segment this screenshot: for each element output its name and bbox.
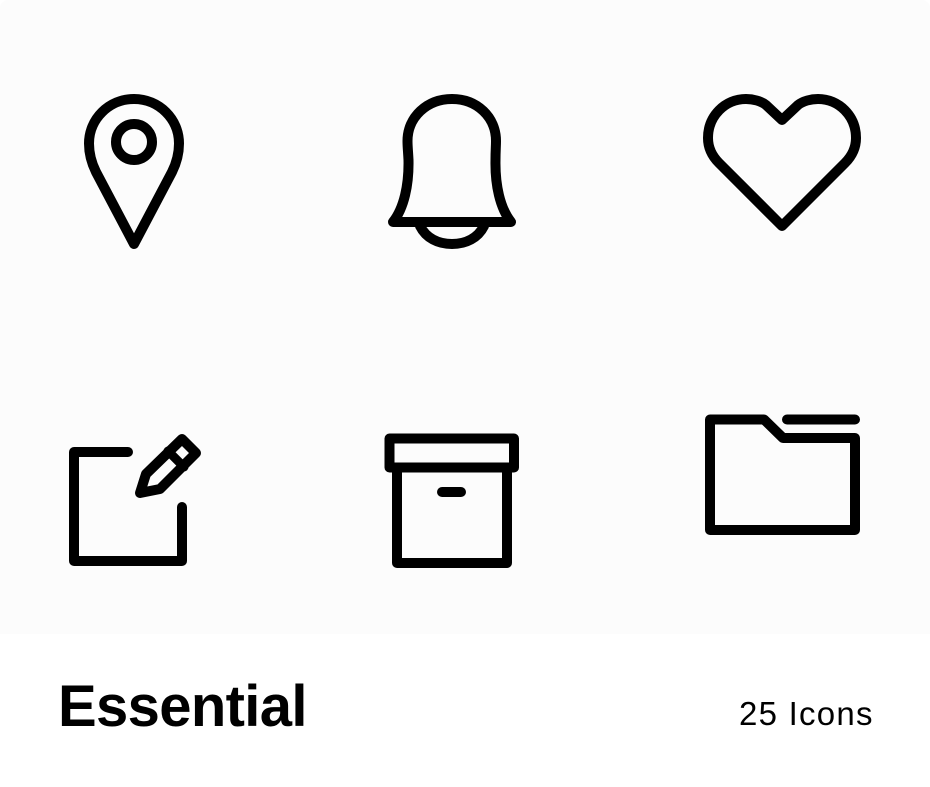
icon: folder	[710, 420, 855, 530]
icon: heart	[708, 99, 856, 226]
icon: edit note	[74, 439, 196, 561]
icon count: 25 Icons	[739, 695, 874, 732]
icon: bell	[393, 99, 511, 244]
icon: archive box	[390, 438, 514, 563]
icon: map pin	[89, 99, 179, 244]
title: Essential	[58, 674, 307, 739]
